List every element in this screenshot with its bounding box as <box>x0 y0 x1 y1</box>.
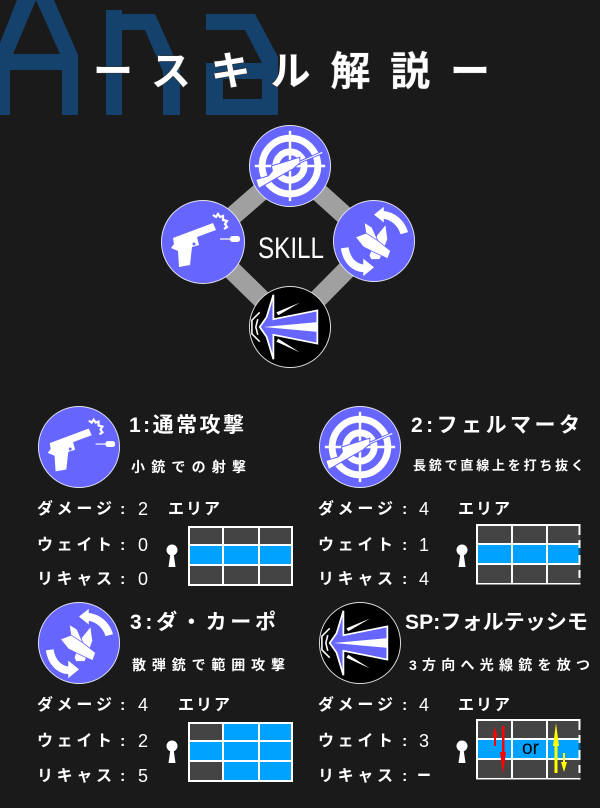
stats: : <box>120 571 125 588</box>
description: 散弾銃で範囲攻撃 <box>132 657 285 673</box>
stats: ダメージ <box>318 695 393 714</box>
stats: 1 <box>419 535 429 555</box>
icon: rifle target <box>319 406 401 488</box>
connector diamond <box>203 166 374 327</box>
stats: : <box>402 537 407 554</box>
skill diagram <box>162 125 415 368</box>
area grid <box>476 524 580 584</box>
panel: skill 2 <box>318 406 584 589</box>
area grid <box>188 722 293 782</box>
red arrows <box>492 726 506 774</box>
stats: 4 <box>138 695 148 715</box>
stats: ウェイト <box>318 732 393 750</box>
icon: pistol <box>38 406 120 488</box>
stats: : <box>402 571 407 588</box>
area grid <box>476 719 580 780</box>
stats <box>37 695 148 786</box>
area grid <box>188 526 293 586</box>
stats: リキャス <box>318 768 393 785</box>
stats: 3 <box>419 731 429 751</box>
stats: 0 <box>138 569 148 589</box>
stats: 4 <box>419 695 429 715</box>
stats: 2 <box>138 499 148 519</box>
stats: リキャス <box>318 571 393 588</box>
stats: : <box>402 768 407 785</box>
icon: shuffle bullets <box>333 200 415 282</box>
area label: エリア <box>168 501 220 518</box>
stats: 4 <box>419 499 429 519</box>
icon: rifle target <box>249 125 331 207</box>
stats: : <box>402 501 407 518</box>
stats: 4 <box>419 569 429 589</box>
center label: SKILL <box>258 232 324 265</box>
stats: リキャス <box>37 571 112 588</box>
description: 小銃での射撃 <box>131 459 246 475</box>
area label: エリア <box>178 697 230 714</box>
stats: : <box>402 697 407 714</box>
icon: shuffle bullets <box>38 602 120 684</box>
stats: ウェイト <box>318 536 393 554</box>
stats <box>318 695 431 785</box>
or label: or <box>522 738 540 759</box>
stats: : <box>120 537 125 554</box>
area label: エリア <box>458 501 510 518</box>
stats: : <box>120 501 125 518</box>
stats: : <box>120 697 125 714</box>
panel: skill SP <box>318 602 590 785</box>
heading: 3:ダ・カーポ <box>130 610 276 634</box>
stats: ダメージ <box>37 695 112 714</box>
stats: : <box>402 733 407 750</box>
stats: 5 <box>138 766 148 786</box>
heading: 2:フェルマータ <box>411 414 580 437</box>
heading: SP:フォルテッシモ <box>405 611 588 634</box>
icon: player <box>166 740 178 763</box>
yellow arrows <box>553 723 567 773</box>
icon: triple beam <box>319 602 401 684</box>
stats <box>318 499 429 589</box>
icon: player <box>456 544 468 567</box>
panel: skill 1 <box>37 406 293 589</box>
stats: ー <box>417 768 431 785</box>
stats: ダメージ <box>318 499 393 518</box>
stats: 0 <box>138 535 148 555</box>
title: ースキル解説ー <box>93 50 490 94</box>
icon: triple beam <box>249 286 331 368</box>
icon: player <box>456 740 468 763</box>
heading: 1:通常攻撃 <box>129 414 244 437</box>
stats: リキャス <box>37 768 112 785</box>
area label: エリア <box>458 697 510 714</box>
icon: pistol <box>162 200 244 284</box>
stats: 2 <box>138 731 148 751</box>
icon: player <box>166 544 178 567</box>
stats: ウェイト <box>37 536 112 554</box>
stats: ダメージ <box>37 499 112 518</box>
description: 3方向へ光線銃を放つ <box>409 657 590 673</box>
background word: Ana <box>0 0 278 115</box>
stats <box>37 499 148 589</box>
stats: : <box>120 768 125 785</box>
panel: skill 3 <box>37 602 293 786</box>
stats: ウェイト <box>37 732 112 750</box>
stats: : <box>120 733 125 750</box>
description: 長銃で直線上を打ち抜く <box>413 458 584 473</box>
